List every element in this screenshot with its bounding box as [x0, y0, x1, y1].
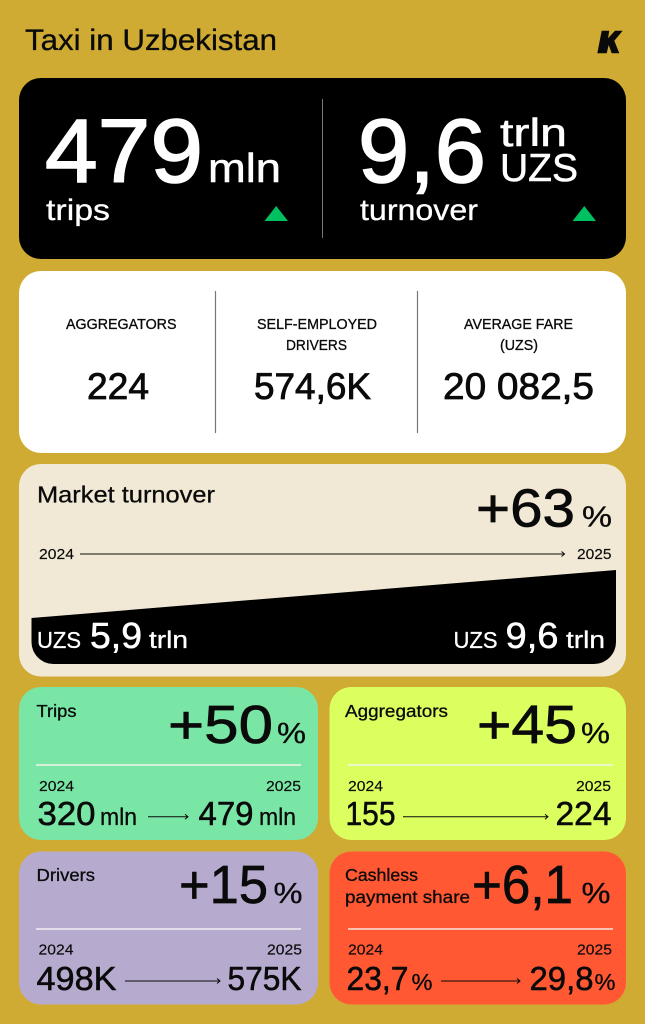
panel: cashless payment share: 2025: [577, 942, 612, 958]
panel: aggregators: +45: [477, 695, 577, 755]
average fare stat: [443, 317, 594, 407]
panel: drivers: +15: [179, 855, 268, 915]
title: Taxi in Uzbekistan: [25, 24, 277, 57]
aggregators stat: 224: [87, 366, 149, 407]
area chart: [32, 570, 616, 664]
panel: market turnover: [19, 464, 626, 676]
timeline: [39, 547, 612, 563]
turnover unit top: trln: [500, 112, 567, 155]
value 2025: 9,6: [506, 615, 558, 656]
average fare stat: AVERAGE FARE: [464, 317, 573, 333]
panel: drivers: [19, 852, 318, 1004]
value 2024: [37, 615, 188, 656]
panel: cashless payment share: 29,8: [530, 960, 594, 997]
panel: cashless payment share: 23,7: [346, 960, 408, 997]
panel: cashless payment share: 2024: [348, 942, 383, 958]
panel: cashless payment share: %: [582, 878, 610, 910]
drivers stat: [254, 317, 377, 407]
panel: key stats: [19, 271, 626, 453]
panel: headline figures: [19, 78, 626, 259]
panel: trips: 320: [38, 795, 96, 832]
heading: Market turnover: [37, 482, 215, 508]
panel: cashless payment share: %: [594, 969, 616, 995]
turnover unit bottom: UZS: [500, 147, 578, 190]
panel: aggregators: Aggregators: [345, 701, 448, 721]
value 2025: [454, 615, 605, 656]
panel: cashless payment share: payment share: [345, 887, 470, 907]
trips label: trips: [46, 194, 110, 227]
panel: aggregators: 2025: [576, 779, 611, 795]
panel: aggregators: 224: [556, 795, 612, 832]
panel: drivers: 2025: [267, 942, 302, 958]
value 2024: 5,9: [90, 615, 142, 656]
panel: cashless payment share: +6,1: [472, 855, 573, 915]
panel: cashless payment share: [330, 852, 626, 1004]
panel: trips: Trips: [36, 701, 77, 721]
panel: trips: 479: [198, 795, 254, 832]
panel: cashless payment share: %: [412, 969, 432, 995]
panel: drivers: Drivers: [36, 865, 95, 885]
average fare stat: 20 082,5: [443, 366, 594, 407]
panel: drivers: %: [274, 878, 302, 910]
trips unit: mln: [208, 145, 281, 191]
drivers stat: 574,6K: [254, 366, 371, 407]
aggregators stat: AGGREGATORS: [66, 317, 176, 333]
trips value: 479: [45, 102, 203, 202]
panel: drivers: 575K: [228, 960, 302, 997]
panel: drivers: 2024: [38, 942, 74, 958]
drivers stat: DRIVERS: [286, 338, 347, 354]
icon: K logo: [597, 31, 623, 53]
timeline: 2025: [577, 547, 612, 563]
value 2025: trln: [566, 627, 605, 654]
panel: trips: 2024: [39, 779, 74, 795]
percent sign: %: [582, 502, 612, 534]
turnover value: 9,6: [358, 102, 486, 202]
panel: aggregators: 2024: [348, 779, 383, 795]
average fare stat: (UZS): [500, 338, 538, 354]
aggregators stat: [66, 317, 176, 407]
panel: cashless payment share: Cashless: [345, 865, 418, 885]
drivers stat: SELF-EMPLOYED: [257, 317, 377, 333]
timeline: 2024: [39, 547, 74, 563]
panel: trips: +50: [168, 695, 273, 755]
panel: aggregators: %: [581, 718, 610, 750]
value 2024: UZS: [37, 627, 81, 653]
panel: aggregators: [330, 687, 626, 840]
panel: drivers: 498K: [36, 960, 116, 997]
value 2024: trln: [149, 627, 188, 654]
value 2025: UZS: [454, 627, 498, 653]
turnover label: turnover: [360, 194, 478, 227]
panel: trips: 2025: [266, 779, 301, 795]
panel: trips: mln: [100, 804, 137, 831]
icon: up triangle trips: [264, 206, 288, 221]
panel: trips: [19, 687, 318, 840]
panel: trips: mln: [259, 804, 296, 831]
growth figure: +63: [476, 478, 575, 538]
icon: up triangle turnover: [573, 206, 596, 221]
panel: aggregators: 155: [346, 795, 396, 832]
panel: trips: %: [277, 718, 306, 750]
